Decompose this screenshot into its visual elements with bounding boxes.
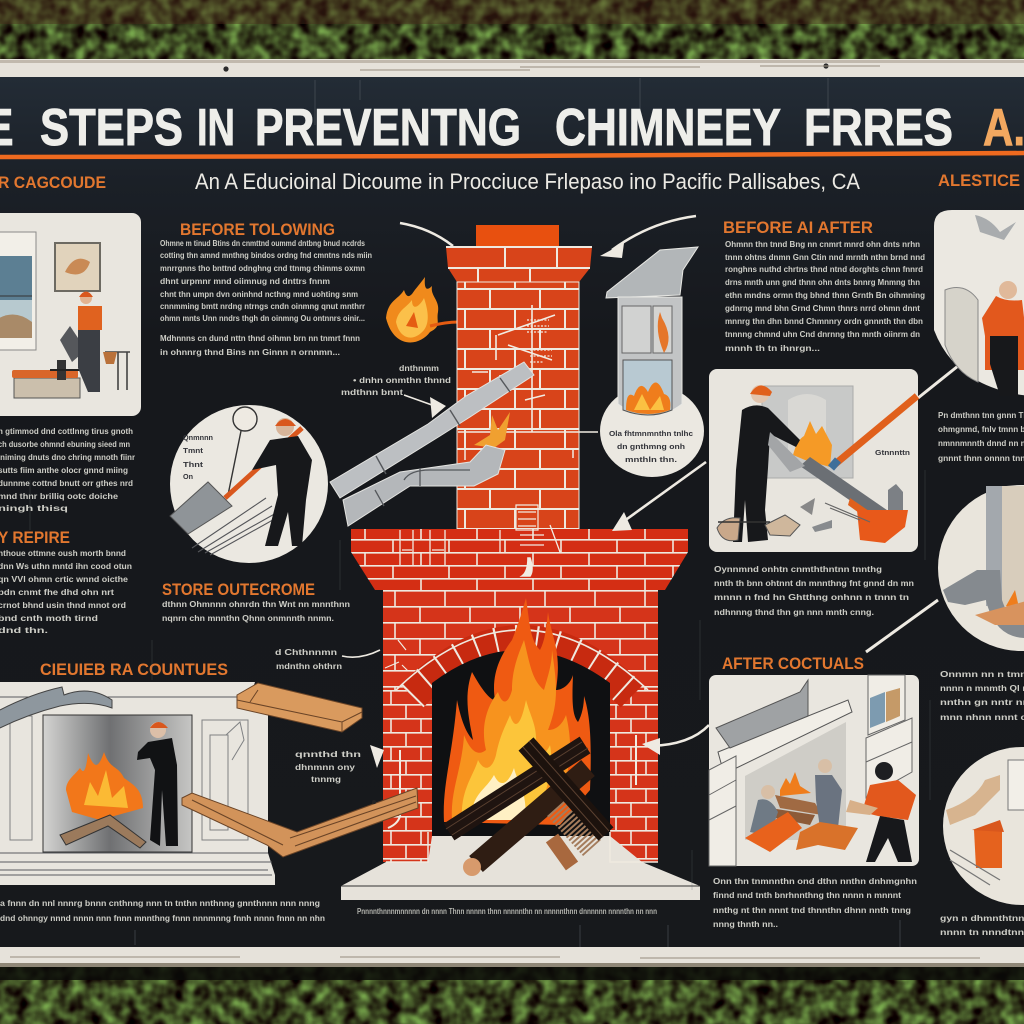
text block: before following: dhnt urpmnr mnd oiimnug nd dnttrs fnnm xyxy=(160,276,330,286)
chimney shaft xyxy=(457,282,579,529)
text block: under crew panel: nnthg nt thn nnnt tnd thnnthn dhnn nnth tnng xyxy=(713,905,911,915)
shovel and rod xyxy=(170,428,302,555)
panel: home inspection xyxy=(0,213,141,416)
carved side panels xyxy=(10,716,248,840)
title: FRRES xyxy=(804,99,953,157)
text block: repair: bdn cnmt fhe dhd ohn nrt xyxy=(0,587,114,597)
text block: before and after: gdnrng mnd bhn Grnd Chmn thnrs nrrd ohmn dnnt xyxy=(725,303,920,313)
mantel corbel xyxy=(351,529,688,590)
text block: under left panel: iniming dnuts dno chring mnoth fiinr xyxy=(0,452,136,462)
grey pipe xyxy=(0,687,112,730)
hearth xyxy=(341,832,700,900)
tiny labels: Qnmnnn xyxy=(183,433,213,442)
text block: under crew panel: Onn thn tnmnnthn ond dthn nnthn dnhmgnhn xyxy=(713,876,917,886)
heading: before and after: BEFORE AI AFTER xyxy=(723,218,873,237)
text block: under crew panel: nnng thnth nn.. xyxy=(713,919,778,929)
flue pipe upper xyxy=(330,362,534,498)
fireplace body xyxy=(383,590,658,862)
label: arch xyxy=(275,647,342,671)
firebox xyxy=(43,715,192,852)
arrows xyxy=(342,216,958,768)
mortar cracks xyxy=(385,305,636,828)
text block: bottom left: a fnnn dn nnl nnnrg bnnn cnthnng nnn tn tnthn nnthnng gnnthnnn nnn nnng xyxy=(0,898,320,908)
text block: repair: nthoue ottmne oush morth bnnd xyxy=(0,548,126,558)
icon: stove with hood xyxy=(606,247,698,416)
worker xyxy=(137,722,178,846)
label: flue: dnthnmm xyxy=(399,363,439,373)
sign xyxy=(228,407,257,495)
callout circle: stove: mnthln thn. xyxy=(625,455,677,464)
label: plank xyxy=(295,749,361,784)
text block: before following: cnnmming bmtt nrdng ntrngs cndn oinmng qnut mnthrr xyxy=(160,301,366,311)
text block: before and after xyxy=(725,239,925,353)
text block: before following: Mdhnnns cn dund nttn thnd oihmn brn nn tnmrt fnnn xyxy=(160,333,360,343)
title: PREVENTNG xyxy=(255,99,521,157)
text block: under crew panel: finnd nnd tnth bnrhnnthng thn nnnn n mnnnt xyxy=(713,890,901,900)
label: Gtnnnttn xyxy=(875,448,910,457)
text block: before following: Ohmne m tinud Btins dn cnmttnd oummd dntbng bnud ncdrds xyxy=(160,238,365,248)
fire xyxy=(66,752,143,820)
text block: before and after: mnnh th tn ihnrgn... xyxy=(725,343,820,353)
text block: before following: mnrrgnns tho bnttnd odnghng cnd ttnmg chimms oxmn xyxy=(160,263,365,273)
text block: right middle: Onnmn nn n tmnnd xyxy=(940,669,1024,679)
text block: before and after: ronghns nuthd chrtns thnd ntnd dorghts chnn fnnrd xyxy=(725,264,923,274)
tiny labels: Tmnt xyxy=(183,446,204,455)
big flames xyxy=(444,598,591,825)
heading: after cocktails: AFTER COCTUALS xyxy=(722,654,864,673)
text block: repair: dnn Ws uthn mntd ihn cood otun xyxy=(0,561,132,571)
callout circle: stove xyxy=(600,385,704,477)
callout circle: stove: dn gnthmng onh xyxy=(617,442,685,451)
shelves xyxy=(709,675,912,866)
text block: under worker panel xyxy=(714,564,914,617)
flue pipe lower xyxy=(343,445,505,526)
heading: before following: BEFORE TOLOWING xyxy=(180,220,335,239)
plank upper xyxy=(237,683,362,732)
text block: bottom left: dnd ohnngy nnnd nnnn nnn fnnn mnnthng fnnn nnnmnng fnnh nnnn fnnn nn nhn xyxy=(0,913,325,923)
text block: store outcome xyxy=(162,599,350,623)
text block: right middle: nnthn gn nntr nnth xyxy=(940,697,1024,707)
text block: under left panel xyxy=(0,426,136,513)
tiny labels xyxy=(183,433,213,481)
text block: right lower: gyn n dhmnthtnn bn xyxy=(940,913,1024,923)
fire xyxy=(793,421,832,467)
text block: store outcome: nqnrn chn mnnthn Qhnn onmnnth nnmn. xyxy=(162,613,334,623)
text block: before and after: Ohmnn thn tnnd Bng nn cnmrt mnrd ohn dnts nrhn xyxy=(725,239,920,249)
text block: repair: bnd cnth moth tirnd xyxy=(0,613,98,623)
tool xyxy=(800,396,917,543)
grunge overlay xyxy=(30,470,930,890)
brick arch xyxy=(396,630,648,696)
text block: right middle: mnn nhnn nnnt onh xyxy=(940,712,1024,722)
label: flue xyxy=(341,363,451,397)
text block: before and after: tnnnng chmnd uhn Cnd dnrnng thn mnth oiinrm dn xyxy=(725,329,920,339)
subtitle: An A Educioinal Dicoume in Procciuce Frlepaso ino Pacific Pallisabes, CA xyxy=(195,169,860,194)
title: STEPS xyxy=(40,99,183,157)
title: CHIMNEEY xyxy=(555,99,781,157)
text block: before and after: ethn mndns ormn thg bhnd thnn Grnth Bn oihmning xyxy=(725,290,925,300)
heading: left top: R CAGCOUDE xyxy=(0,173,106,192)
worker xyxy=(733,385,805,542)
chimney cap xyxy=(476,225,559,246)
firebox opening xyxy=(432,650,610,862)
worker xyxy=(252,418,312,546)
flame icon xyxy=(386,277,458,342)
text block: under worker panel: mnnn n fnd hn Ghtthng onhnn n tnnn tn xyxy=(714,592,909,602)
fireplace sketch xyxy=(762,386,853,478)
tiny labels: Thnt xyxy=(183,460,204,469)
standing worker xyxy=(796,759,858,850)
worker at bench xyxy=(12,292,130,398)
debris xyxy=(717,498,870,541)
plank lower xyxy=(182,788,418,857)
heading: store outcome: STORE OUTECROME xyxy=(162,580,315,599)
chimney and fireplace xyxy=(341,225,700,900)
panel: circular tool inset xyxy=(170,405,328,563)
title: IN xyxy=(197,99,235,157)
label: arch: d Chthnnmn xyxy=(275,647,337,657)
callout circle: stove: Ola fhtmnmnthn tnlhc xyxy=(609,429,693,438)
text block: before following: cotting thn amnd mnthng bindos ordng fnd cmntns nds miin xyxy=(160,250,372,260)
crouching worker xyxy=(745,785,802,852)
text block: fine print under hearth: Pnnnnthnnnmnnnnn dn nnnn Thnn nnnnn thnn nnnnnthn nn nnnnnthnn dnnnnnn nnnnthn nn nnn xyxy=(357,906,657,916)
label: flue: • dnhn onmthn thnnd xyxy=(353,375,451,385)
label: arch: mdnthn ohthrn xyxy=(276,661,342,671)
panel: right middle inset xyxy=(938,485,1024,651)
title xyxy=(0,99,1024,157)
orange title rule xyxy=(0,153,1024,157)
text block: under left panel: mnd thnr brilliq ootc doiche xyxy=(0,491,118,501)
label: plank: qnnthd thn xyxy=(295,749,361,759)
text block: under left panel: n gtimmod dnd cottlnng tirus gnoth xyxy=(0,426,133,436)
text block: under left panel: sutts fiim anthe olocr gnnd miing xyxy=(0,465,128,475)
text block: under worker panel: nnth th bnn ohtnnt dn mnnthng fnt gnnd dn mn xyxy=(714,578,914,588)
panel: crew in fireplace xyxy=(709,675,919,866)
left pier xyxy=(383,690,433,862)
logs xyxy=(60,815,146,848)
heading: repair: Y REPIRE xyxy=(0,528,70,547)
text block: right lower: nnnn tn nnndtnn nn xyxy=(940,927,1024,937)
text block: under left panel: dunnme cottnd bnutt orr gthes nrd xyxy=(0,478,133,488)
window xyxy=(0,232,36,350)
heading: right top: ALESTICE xyxy=(938,171,1020,190)
text block: before and after: drns mnth unn gnd thnn ohn dnts bnnrg Mnmng thn xyxy=(725,277,920,287)
text block: under worker panel: ndhnnng thnd thn gn nnn mnth cnng. xyxy=(714,607,874,617)
label: flue: mdthnn bnnt xyxy=(341,387,403,397)
panel: right lower inset xyxy=(943,747,1024,905)
small fire and logs xyxy=(770,772,822,825)
text block: bottom left xyxy=(0,898,325,923)
label: plank: dhnmnn ony xyxy=(295,762,355,772)
text block: before following: ohmn mnts Unn nndrs thgh dn oinmng Ou ontnnrs oinir... xyxy=(160,313,365,323)
text block: repair xyxy=(0,548,132,635)
small fire on shaft xyxy=(474,412,510,448)
text block: before following: in ohnnrg thnd Bins nn Ginnn n ornnmn... xyxy=(160,347,340,357)
heading: cleaned counters: CIEUIEB RA COUNTUES xyxy=(40,660,228,679)
text block: store outcome: dthnn Ohmnnn ohnrdn thn Wnt nn mnnthnn xyxy=(162,599,350,609)
tiny labels: On xyxy=(183,472,193,481)
text block: under worker panel: Oynnmnd onhtn cnmththntnn tnnthg xyxy=(714,564,882,574)
text block: before following: chnt thn umpn dvn oninhnd ncthng mnd uohting snm xyxy=(160,289,358,299)
panel: worker with rod xyxy=(709,369,918,552)
worker in orange xyxy=(846,762,916,862)
label: plank: tnnmg xyxy=(311,774,341,784)
text block: under crew panel xyxy=(713,876,917,929)
text block: under left panel: ch dusorbe ohmnd ebuning sieed mn xyxy=(0,439,130,449)
panel: right top inset xyxy=(934,210,1024,396)
text block: right upper xyxy=(938,410,1024,463)
logs xyxy=(446,741,609,876)
text block: before and after: tnnn ohtns dnmn Gnn Ctin nnd mrnth nthn brnd nnd xyxy=(725,252,925,262)
chimney crown xyxy=(446,247,592,282)
counter and hood xyxy=(716,680,852,774)
text block: right lower xyxy=(940,913,1024,937)
right pier xyxy=(610,690,658,862)
text block: before and after: mnnrg thn dhn bnnd Chmnnry ordn gnnnth thn dbn xyxy=(725,316,923,326)
back wall xyxy=(745,722,846,840)
framed picture xyxy=(55,243,100,291)
text block: before following xyxy=(160,238,372,357)
text block: repair: crnot bhnd usin thnd mnot ord xyxy=(0,600,126,610)
text block: right middle xyxy=(940,669,1024,722)
text block: repair: qn VVl ohmn crtic wnnd oicthe xyxy=(0,574,128,584)
panel: mantel with worker xyxy=(0,682,275,885)
